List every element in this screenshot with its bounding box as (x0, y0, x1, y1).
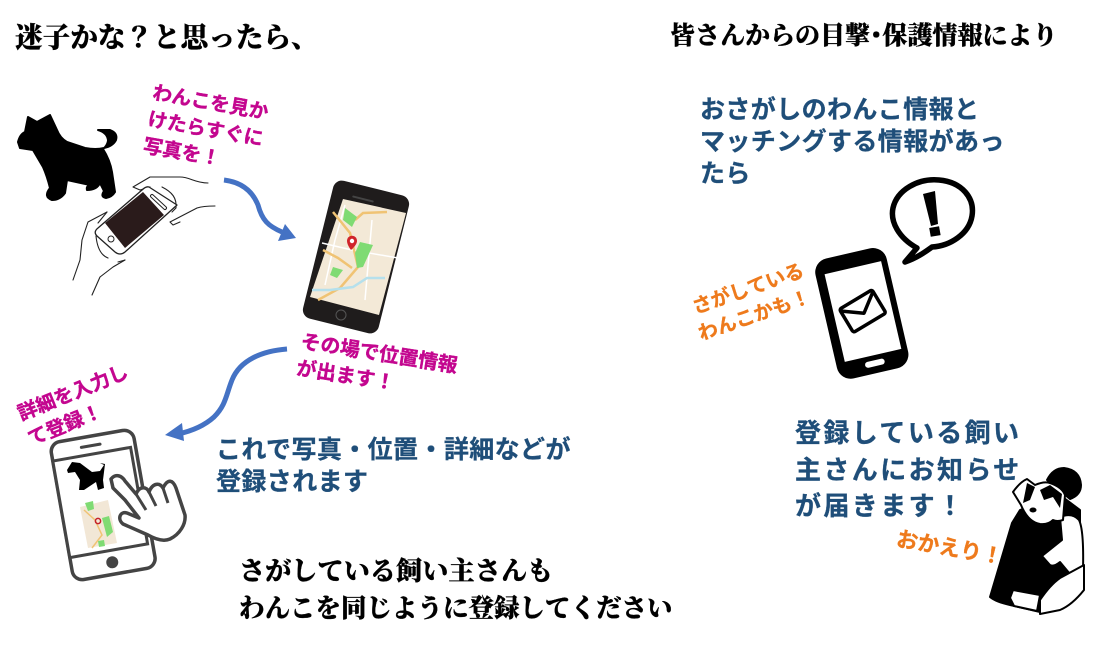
callout: take a photo (141, 82, 270, 170)
text: owners should register (239, 557, 673, 623)
text: registration note: 登録されます (216, 468, 368, 496)
icon: small map on registration phone (80, 500, 117, 548)
callout: may be your dog: さがしている (690, 260, 807, 319)
icon: smartphone with map (301, 179, 411, 335)
icon: hands holding phone (73, 177, 215, 295)
text: registration note (216, 436, 571, 496)
icon: speech bubble with exclamation (892, 180, 972, 262)
callout: welcome home: おかえり！ (895, 527, 1005, 569)
callout: take a photo: けたらすぐに (146, 109, 265, 150)
text: owners should register: わんこを同じように登録してください (239, 594, 673, 623)
callout: location appears: が出ます！ (295, 358, 396, 395)
title: left heading: 迷子かな？と思ったら、 (15, 22, 319, 53)
icon: small dog on registration phone (67, 462, 105, 490)
title: right heading: 皆さんからの目撃･保護情報により (670, 23, 1058, 50)
callout: take a photo: わんこを見か (151, 82, 270, 124)
text: owner notified: 登録している飼い (795, 418, 1021, 448)
callout: may be your dog: わんこかも！ (696, 286, 813, 345)
text: owner notified (795, 418, 1022, 521)
arrow: map to registration (165, 349, 287, 441)
text: owner notified: 主さんにお知らせ (795, 454, 1022, 484)
callout: enter details: 詳細を入力し (15, 361, 131, 425)
callout: may be your dog (690, 260, 813, 345)
icon: pointing hand (111, 476, 185, 540)
text: matching information: たら (700, 160, 751, 188)
text: registration note: これで写真・位置・詳細などが (216, 436, 571, 464)
text: owners should register: さがしている飼い主さんも (239, 557, 553, 586)
icon: smartphone with mail (812, 245, 911, 381)
icon: tilted phone in hands (95, 187, 177, 254)
callout: enter details: て登録！ (25, 401, 105, 450)
text: matching information (700, 96, 1005, 188)
text: owner notified: が届きます！ (795, 491, 965, 521)
text: matching information: マッチングする情報があっ (700, 128, 1005, 156)
text: matching information: おさがしのわんこ情報と (700, 96, 979, 124)
icon: black dog silhouette (18, 115, 116, 200)
callout: take a photo: 写真を！ (141, 135, 222, 170)
icon: registration smartphone (50, 429, 157, 581)
icon: owner hugging dog (990, 468, 1084, 614)
arrow: photo to map (224, 180, 296, 241)
callout: location appears: その場で位置情報 (299, 331, 459, 377)
